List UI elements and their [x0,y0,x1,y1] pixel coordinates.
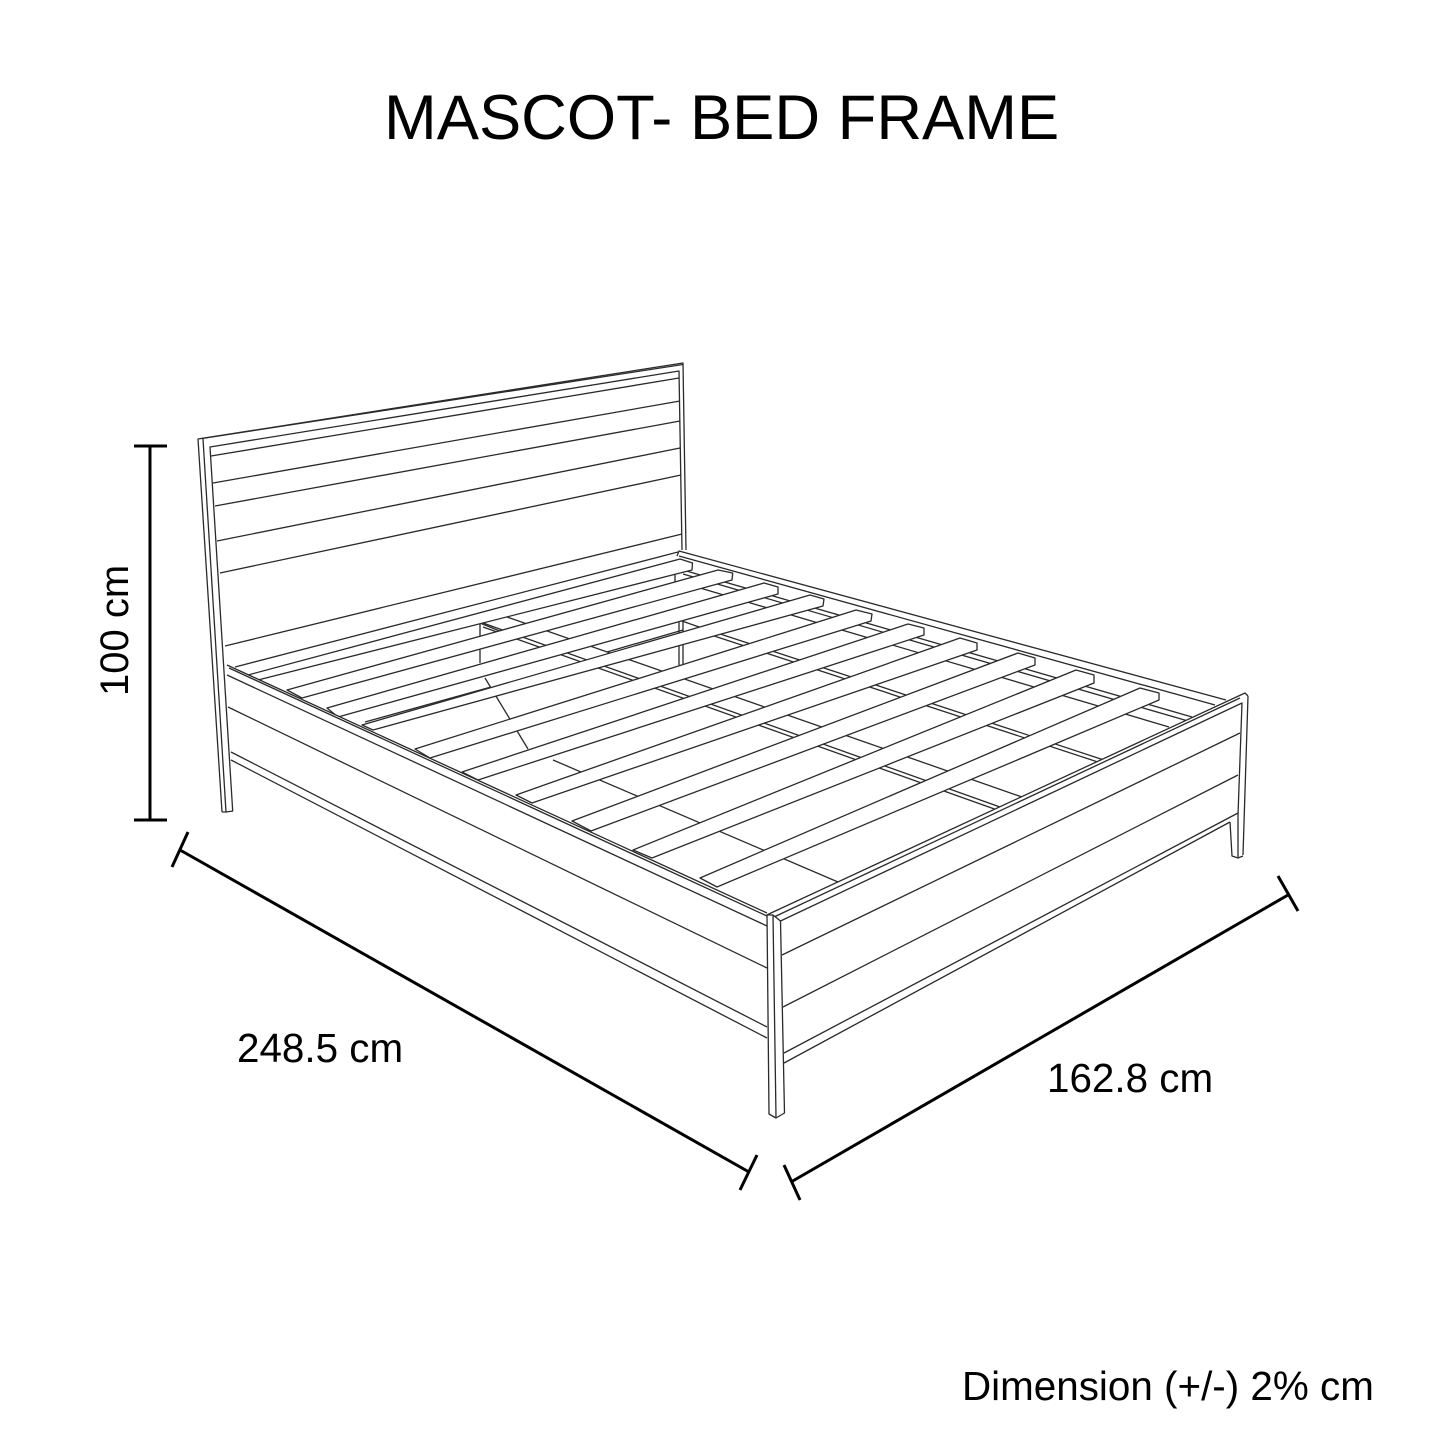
slats [248,559,1159,887]
width label: 162.8 cm [1047,1055,1213,1101]
back rail by the headboard [235,552,678,667]
width dimension [784,876,1298,1200]
length dimension [172,832,757,1190]
tolerance note: Dimension (+/-) 2% cm [962,1363,1374,1409]
length label: 248.5 cm [237,1025,403,1071]
footboard [767,693,1248,1063]
title: MASCOT- BED FRAME [384,83,1059,153]
under-deck support rails [365,570,1192,882]
headboard [198,363,686,812]
height label: 100 cm [93,565,137,696]
bed posts and legs [222,696,1248,1118]
far side rail [677,551,1226,705]
bed frame line drawing [198,363,1248,1118]
long side rail [227,665,767,1040]
